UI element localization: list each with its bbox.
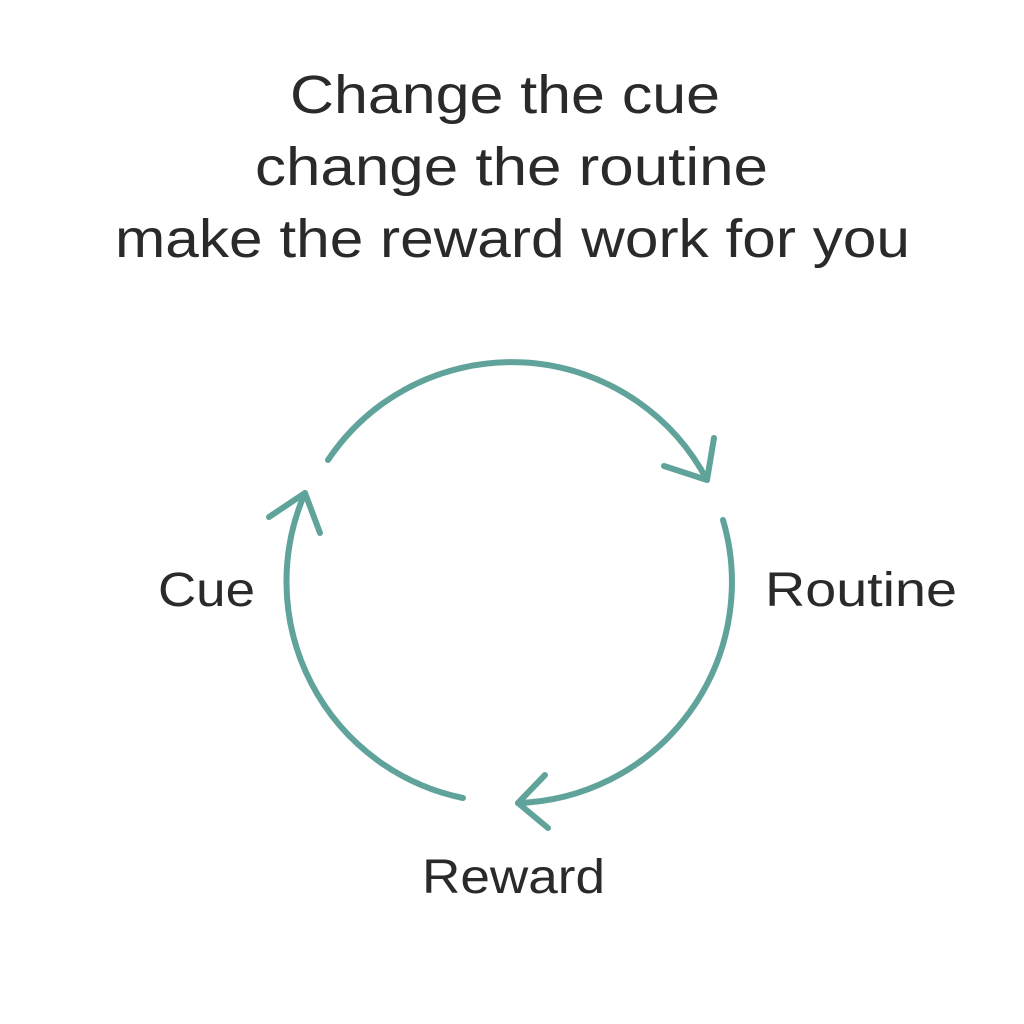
title: Change the cue bbox=[290, 65, 720, 125]
cycle diagram bbox=[269, 362, 732, 828]
arrow: cue to routine bbox=[328, 362, 714, 480]
title: make the reward work for you bbox=[115, 209, 910, 269]
label: routine: Routine bbox=[765, 564, 957, 617]
arrow: routine to reward bbox=[518, 520, 732, 828]
label: cue: Cue bbox=[158, 564, 255, 617]
arrow: reward to cue bbox=[269, 493, 463, 798]
label: reward: Reward bbox=[422, 851, 605, 904]
title bbox=[115, 65, 910, 269]
title: change the routine bbox=[255, 137, 768, 197]
